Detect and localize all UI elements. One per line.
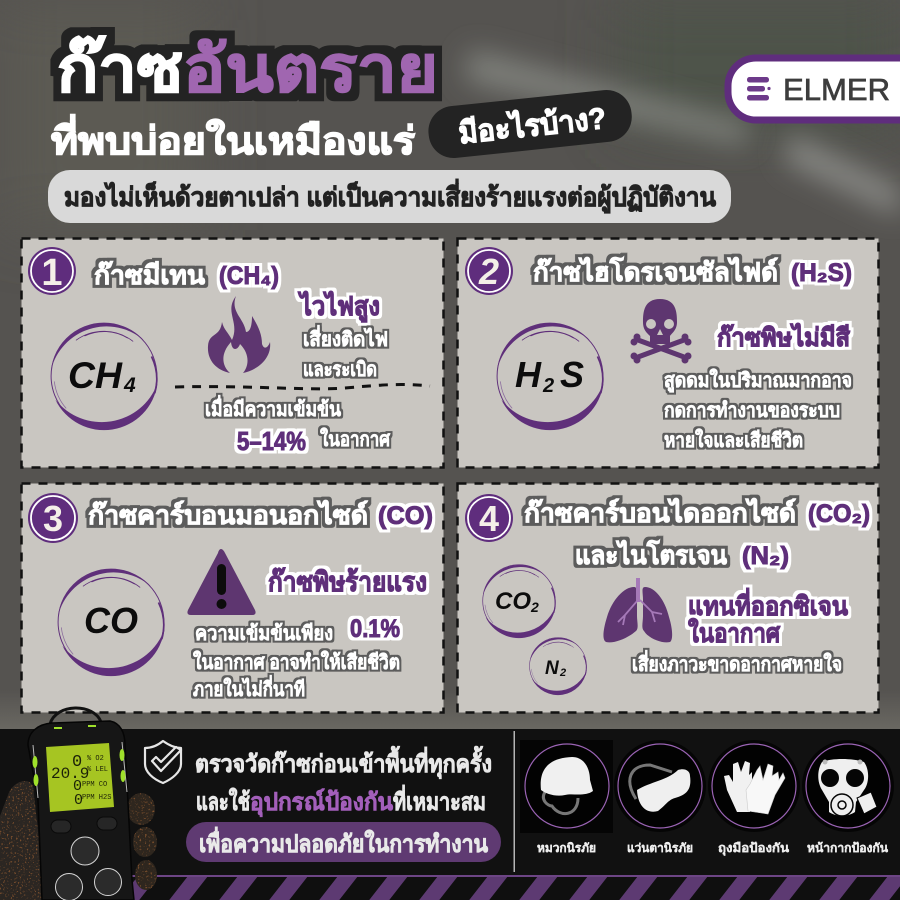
text: fire and explosion risk: เสี่ยงติดไฟ xyxy=(303,324,388,351)
heading 3: ก๊าซคาร์บอนมอนอกไซด์ xyxy=(88,499,368,530)
heading 4 line 2: และไนโตรเจน xyxy=(575,539,727,570)
device body xyxy=(28,721,134,900)
H2S ring xyxy=(497,323,603,430)
text: lethal concentration: ในอากาศ อาจทำให้เสียชีวิต xyxy=(193,650,400,674)
icon: gas mask xyxy=(802,740,894,832)
footer message: อุปกรณ์ป้องกัน xyxy=(250,788,394,818)
tilted badge: มีอะไรบ้าง?: มีอะไรบ้าง? xyxy=(457,100,608,150)
LCD readings: % O2 xyxy=(87,755,104,763)
callout: displaces oxygen: แทนที่ออกซิเจน xyxy=(688,587,848,621)
tilted badge: มีอะไรบ้าง? xyxy=(426,87,634,161)
tagline pill xyxy=(48,170,731,223)
formula heading CO: (CO) xyxy=(378,502,433,530)
formula heading N2: (N₂) xyxy=(742,542,789,570)
LCD readings: PPM CO xyxy=(82,781,107,789)
callout: displaces oxygen xyxy=(688,587,848,648)
callout: highly toxic: ก๊าซพิษร้ายแรง xyxy=(268,567,427,597)
tagline pill: มองไม่เห็นด้วยตาเปล่า แต่เป็นความเสี่ยงร้ายแรงต่อผู้ปฏิบัติงาน xyxy=(64,178,716,214)
callout: flammable: ไวไฟสูง xyxy=(297,290,380,323)
icon: hard hat xyxy=(520,740,613,833)
CO ring: CO xyxy=(84,600,138,641)
title: ก๊าซอันตราย xyxy=(57,33,438,105)
icon: flame xyxy=(208,296,270,373)
CO2 ring xyxy=(483,565,556,638)
H2S ring: H xyxy=(515,354,542,395)
number badge 3 xyxy=(28,493,78,543)
pill: for workplace safety: เพื่อความปลอดภัยในการทำงาน xyxy=(199,826,489,858)
callout: colourless toxic gas: ก๊าซพิษไม่มีสี xyxy=(717,322,851,352)
LCD readings: PPM H2S xyxy=(82,794,111,802)
hazard stripe xyxy=(0,875,900,900)
formula heading CO2: (CO₂) xyxy=(808,500,870,528)
text: lethal concentration: 0.1% xyxy=(350,615,400,643)
text: inhalation effects xyxy=(664,368,852,452)
panel 3: carbon monoxide xyxy=(22,484,444,712)
number badge 2 xyxy=(465,247,513,295)
LCD readings xyxy=(51,753,111,809)
footer message: ที่เหมาะสม xyxy=(393,784,486,816)
panel 2: hydrogen sulfide xyxy=(458,238,878,468)
CH4 ring: 4 xyxy=(123,374,136,397)
side highlights xyxy=(33,742,127,798)
footer message: ตรวจวัดก๊าซก่อนเข้าพื้นที่ทุกครั้ง xyxy=(195,745,492,780)
H2S ring: 2 xyxy=(542,375,554,397)
text: lethal concentration: ความเข้มข้นเพียง xyxy=(195,622,333,645)
label: protective gloves: ถุงมือป้องกัน xyxy=(718,841,790,856)
pill: for workplace safety xyxy=(186,822,501,862)
text: inhalation effects: สูดดมในปริมาณมากอาจ xyxy=(664,368,852,394)
N2 ring xyxy=(530,638,587,695)
text: concentration: 5–14% xyxy=(237,426,306,456)
logo: ELMER xyxy=(728,58,900,120)
panel 4: carbon dioxide and nitrogen xyxy=(458,484,878,712)
LCD readings: 0 xyxy=(72,753,82,772)
sensor ports xyxy=(56,837,122,900)
icon: shield with check xyxy=(145,741,181,783)
number badge 4: 4 xyxy=(479,498,499,539)
number badge 2: 2 xyxy=(478,251,499,292)
LCD readings: 0 xyxy=(73,778,82,795)
icon: skull and crossbones xyxy=(630,299,692,364)
LCD readings: % LEL xyxy=(87,766,108,774)
icon: lungs xyxy=(603,578,672,642)
text: fire and explosion risk xyxy=(303,324,388,381)
text: lethal concentration: ภายในไม่กี่นาที xyxy=(193,674,305,701)
text: fire and explosion risk: และระเบิด xyxy=(303,359,377,381)
device buttons xyxy=(51,817,117,833)
heading 2: ก๊าซไฮโดรเจนซัลไฟด์ xyxy=(533,256,778,287)
number badge 1 xyxy=(28,247,76,295)
text: concentration: เมื่อมีความเข้มข้น xyxy=(205,394,341,421)
panel 1: methane xyxy=(22,238,444,468)
icon: warning triangle xyxy=(187,549,256,615)
footer message: และใช้ xyxy=(196,787,250,816)
title: ก๊าซอันตราย: ก๊าซ xyxy=(57,33,183,105)
LED strips xyxy=(32,725,126,786)
LCD readings: 20.9 xyxy=(51,765,89,783)
CH4 ring: CH xyxy=(68,355,123,396)
H2S ring: S xyxy=(560,354,584,395)
number badge 3: 3 xyxy=(43,498,63,539)
glove palm and thumb xyxy=(0,781,42,900)
carry handle xyxy=(50,708,101,724)
CO ring xyxy=(58,569,164,676)
text: lethal concentration xyxy=(193,615,400,701)
title: ก๊าซอันตราย: อันตราย xyxy=(183,33,438,105)
CO2 ring: CO xyxy=(495,588,531,615)
number badge 1: 1 xyxy=(41,252,63,294)
number badge 4 xyxy=(465,494,513,542)
gas detector held in gloved hand xyxy=(0,708,157,900)
callout: displaces oxygen: ในอากาศ xyxy=(688,618,780,648)
text: asphyxiation risk: เสี่ยงภาวะขาดอากาศหายใจ xyxy=(632,649,842,676)
footer message xyxy=(195,745,492,818)
CO2 ring: 2 xyxy=(530,599,539,615)
formula heading H2S: (H₂S) xyxy=(791,259,852,287)
heading 1: ก๊าซมีเทน xyxy=(94,260,205,290)
text: concentration xyxy=(205,394,391,456)
N2 ring: N xyxy=(545,658,560,679)
N2 ring: 2 xyxy=(559,667,566,679)
logo: ELMER: ELMER xyxy=(783,72,890,107)
subtitle: ที่พบบ่อยในเหมืองแร่: ที่พบบ่อยในเหมืองแร่ xyxy=(51,114,416,163)
label: safety goggles: แว่นตานิรภัย xyxy=(627,841,693,855)
text: concentration: ในอากาศ xyxy=(320,427,391,451)
text: inhalation effects: กดการทำงานของระบบ xyxy=(664,400,840,422)
glove fingers xyxy=(127,793,157,890)
footer band xyxy=(0,729,900,876)
formula heading CH4: (CH₄) xyxy=(219,262,279,290)
text: inhalation effects: หายใจและเสียชีวิต xyxy=(664,428,803,452)
icon: protective gloves xyxy=(708,740,800,832)
LCD screen xyxy=(46,743,114,812)
CH4 ring xyxy=(51,323,157,430)
icon: safety goggles xyxy=(614,740,706,832)
LCD readings: 0 xyxy=(74,792,83,809)
label: hard hat: หมวกนิรภัย xyxy=(537,841,596,855)
label: gas mask: หน้ากากป้องกัน xyxy=(807,841,889,855)
heading 4 line 1: ก๊าซคาร์บอนไดออกไซด์ xyxy=(524,497,796,528)
